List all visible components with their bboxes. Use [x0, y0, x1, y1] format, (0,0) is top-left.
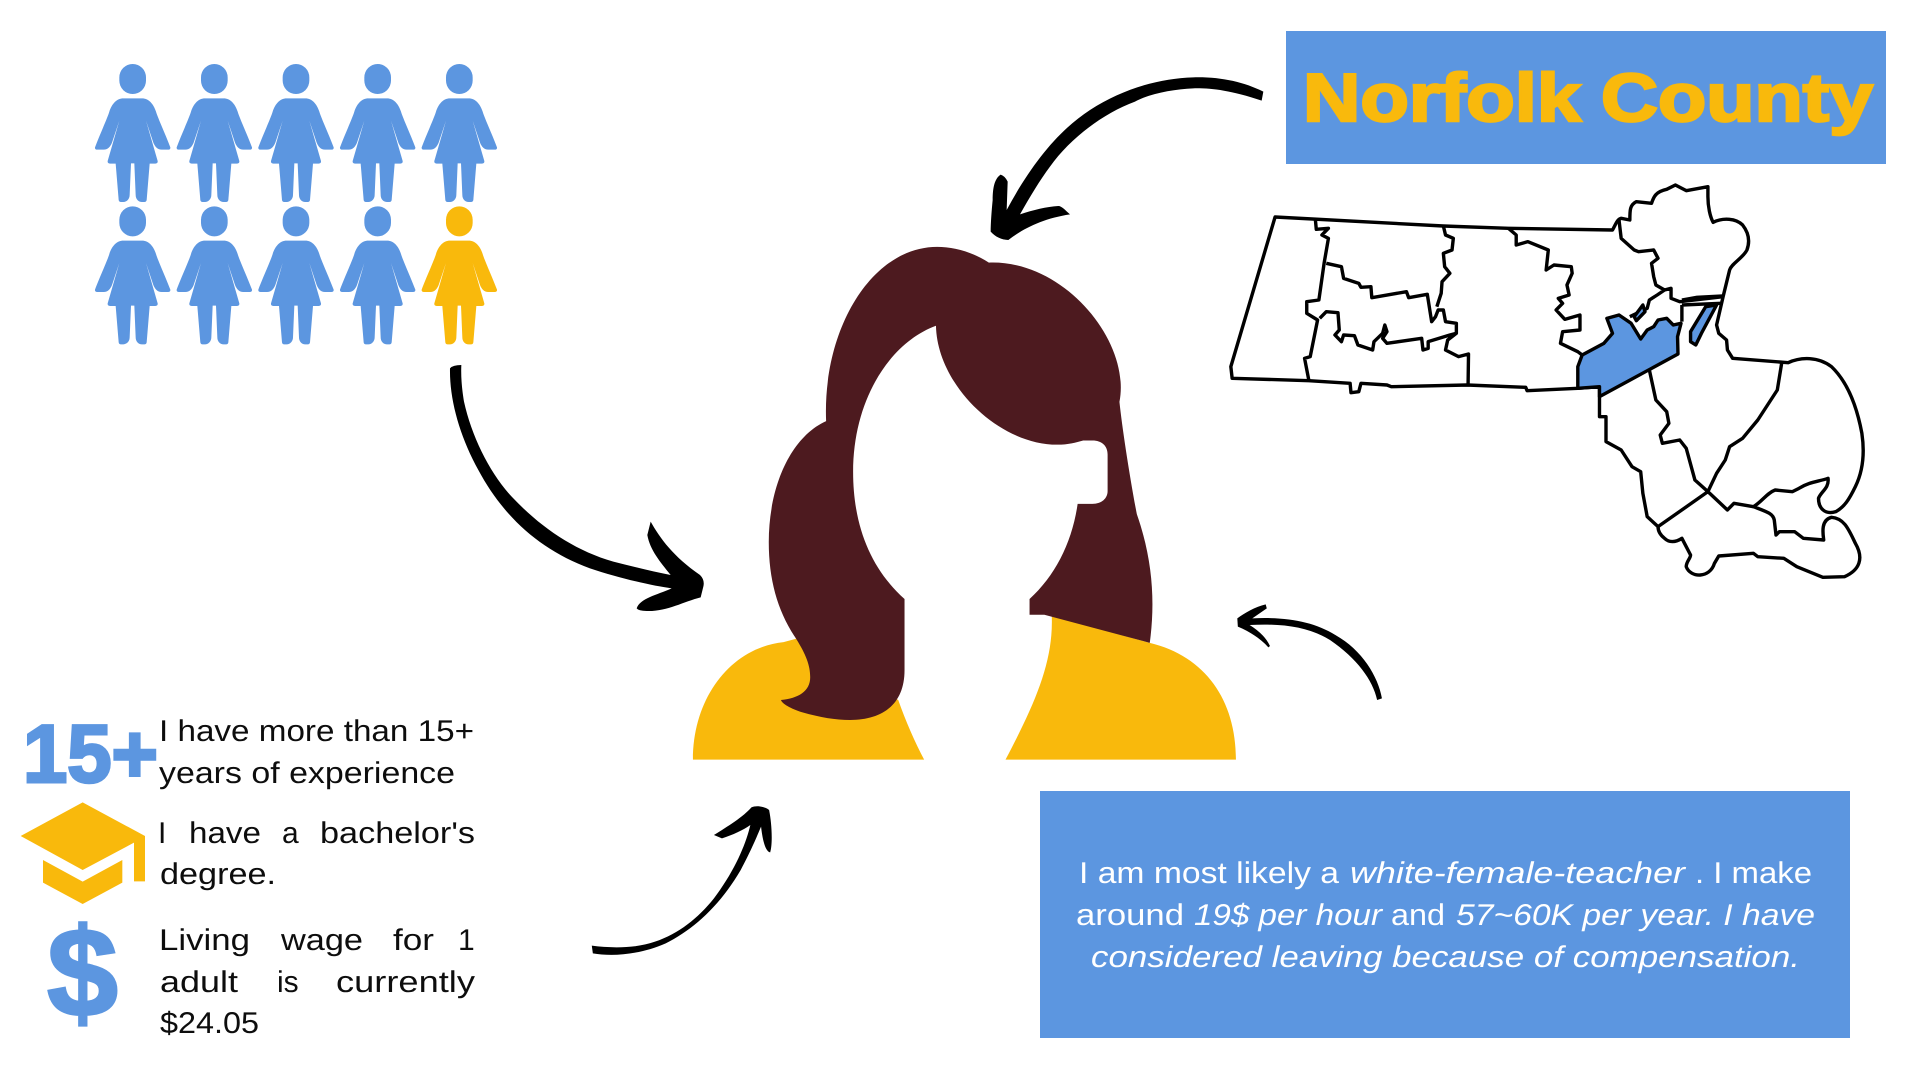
heading: Norfolk County: Norfolk [1303, 60, 1581, 136]
state outline [1231, 185, 1863, 577]
living wage text: wage [280, 924, 363, 957]
icon: woman row 2 col 3 [258, 206, 334, 344]
county borders [1305, 220, 1782, 527]
heading: Norfolk County [1303, 60, 1873, 136]
big number 15+: 15+ [23, 709, 158, 800]
arrow: county title to portrait [991, 77, 1263, 240]
icon: woman row 1 col 4 [340, 64, 415, 202]
Norfolk county fill [1578, 315, 1681, 397]
arrow: stats to portrait [592, 806, 772, 955]
degree text: I [158, 817, 166, 850]
description text: 57~60K per year. I have [1456, 899, 1815, 932]
panel: county title [1286, 31, 1886, 164]
living wage text: is [277, 966, 299, 999]
pictogram: ten women, one highlighted [95, 64, 497, 344]
shirt left [693, 639, 924, 760]
living wage text: currently [336, 966, 475, 999]
Norfolk coastal strip [1691, 305, 1717, 345]
portrait: faceless woman with long hair [693, 247, 1236, 760]
description text: considered leaving because of compensation. [1091, 941, 1800, 974]
living wage text [159, 924, 475, 1040]
hair [769, 247, 1152, 720]
icon: woman row 2 col 2 [177, 206, 252, 344]
living wage text: for [393, 924, 434, 957]
map: Massachusetts counties with Norfolk highlighted [1231, 185, 1863, 577]
icon: woman row 1 col 5 [422, 64, 497, 202]
arrow: description box to portrait [1237, 604, 1382, 700]
living wage text: Living [159, 924, 250, 957]
living wage text: 1 [458, 924, 475, 957]
degree text: degree. [160, 858, 276, 891]
experience text: I have more than 15+ [159, 715, 474, 748]
degree text: bachelor's [320, 817, 475, 850]
description text: I am most likely a [1079, 857, 1339, 890]
icon: woman row 2 col 1 [95, 206, 170, 344]
experience text: years of experience [159, 757, 455, 790]
degree text: have [189, 817, 261, 850]
degree text: a [282, 817, 299, 850]
Norfolk harbor island [1634, 305, 1645, 321]
icon: woman row 1 col 3 [258, 64, 334, 202]
living wage text: $24.05 [160, 1007, 259, 1040]
icon: woman row 2 col 4 [340, 206, 415, 344]
degree text [158, 817, 475, 891]
stat: bachelor's degree [21, 802, 475, 904]
icon: woman row 1 col 2 [177, 64, 252, 202]
description text: 19$ per hour [1194, 899, 1383, 932]
icon: graduation cap [21, 802, 145, 904]
description text [1076, 857, 1815, 974]
living wage text: adult [160, 966, 239, 999]
arrow: pictogram to portrait [450, 365, 704, 611]
experience text [159, 715, 474, 790]
icon: woman highlighted in gold [422, 206, 497, 344]
description text: and [1391, 899, 1445, 932]
heading: Norfolk County: County [1601, 60, 1873, 136]
description text: around [1076, 899, 1184, 932]
stat: 15+ years of experience [23, 709, 474, 800]
panel: teacher description [1040, 791, 1850, 1038]
icon: dollar sign: $ [47, 902, 118, 1043]
shirt right [1006, 616, 1236, 760]
stat: living wage [47, 902, 475, 1043]
icon: woman row 1 col 1 [95, 64, 170, 202]
description text: white-female-teacher [1350, 857, 1686, 890]
description text: . I make [1695, 857, 1812, 890]
